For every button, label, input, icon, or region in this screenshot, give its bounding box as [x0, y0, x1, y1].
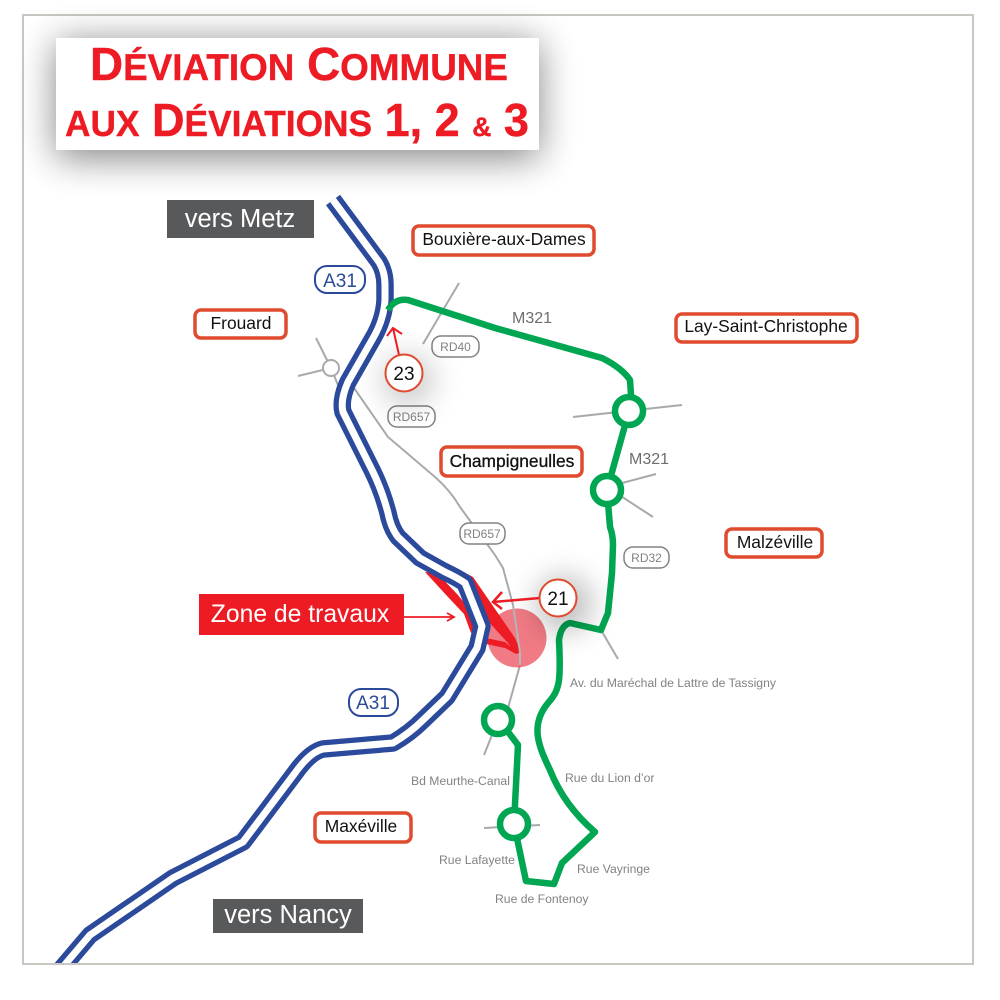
town: Bouxière-aux-Dames: Bouxière-aux-Dames: [422, 229, 586, 249]
street: Rue Vayringe: Rue Vayringe: [577, 862, 650, 876]
A31 shield north: A31: [323, 271, 357, 292]
town: Champigneulles: Champigneulles: [450, 451, 575, 471]
shield: RD40: [432, 336, 479, 357]
town: Champigneulles: [441, 447, 582, 476]
shield: RD32: [624, 547, 669, 568]
exit marker 23: 23: [393, 364, 415, 385]
red work zone: [425, 563, 546, 668]
exit marker 23: [382, 328, 434, 406]
shield: RD40: RD40: [440, 340, 471, 354]
roundabouts: [484, 397, 643, 838]
street: Bd Meurthe-Canal: Bd Meurthe-Canal: [411, 774, 510, 788]
A31 shield south: [349, 689, 398, 716]
road shields: [388, 336, 669, 568]
green diversion route: [388, 300, 643, 884]
A31 shield north: [315, 266, 365, 293]
town: Malzéville: Malzéville: [737, 532, 813, 552]
shield: RD657 south: [460, 523, 505, 544]
town: Malzéville: [726, 529, 822, 557]
grey secondary roads: [298, 283, 682, 828]
street: Av. du Maréchal de Lattre de Tassigny: Av. du Maréchal de Lattre de Tassigny: [570, 676, 777, 690]
label: vers Nancy: vers Nancy: [224, 901, 352, 929]
work zone callout: Zone de travaux: [211, 601, 390, 628]
town: Maxéville: [315, 813, 411, 842]
street: Rue Lafayette: Rue Lafayette: [439, 853, 515, 867]
label: vers Metz: [167, 200, 314, 238]
exit marker 21: 21: [547, 589, 569, 610]
road labels: [512, 310, 669, 468]
street: Rue de Fontenoy: Rue de Fontenoy: [495, 892, 589, 906]
shield: RD657 north: RD657: [393, 410, 430, 424]
town: Bouxière-aux-Dames: [413, 226, 594, 255]
town: Frouard: [195, 310, 286, 338]
motorway A31: [56, 200, 482, 975]
small grey roundabout: [323, 360, 339, 376]
road: M321 north: M321: [512, 310, 552, 327]
title text: DÉVIATION COMMUNE: [90, 38, 508, 90]
exit marker 21: [493, 576, 592, 632]
town: Lay-Saint-Christophe: [676, 314, 857, 342]
town: Lay-Saint-Christophe: Lay-Saint-Christophe: [684, 316, 848, 336]
street: Rue du Lion d'or: Rue du Lion d’or: [565, 771, 654, 785]
shield: RD657 south: RD657: [463, 527, 501, 541]
shield: RD657 north: [388, 406, 435, 427]
shield: RD32: RD32: [631, 551, 662, 565]
town: Frouard: Frouard: [211, 313, 271, 333]
A31 shield south: A31: [356, 693, 390, 714]
town: Maxéville: Maxéville: [325, 816, 397, 836]
title text: [65, 38, 529, 146]
title text: AUX DÉVIATIONS 1, 2 & 3: [65, 94, 529, 146]
title panel: [56, 38, 539, 158]
street labels: [411, 676, 777, 906]
label: vers Metz: vers Metz: [185, 205, 295, 233]
road: M321 east: M321: [629, 451, 669, 468]
town labels: [195, 226, 857, 842]
work zone callout: [199, 594, 454, 635]
